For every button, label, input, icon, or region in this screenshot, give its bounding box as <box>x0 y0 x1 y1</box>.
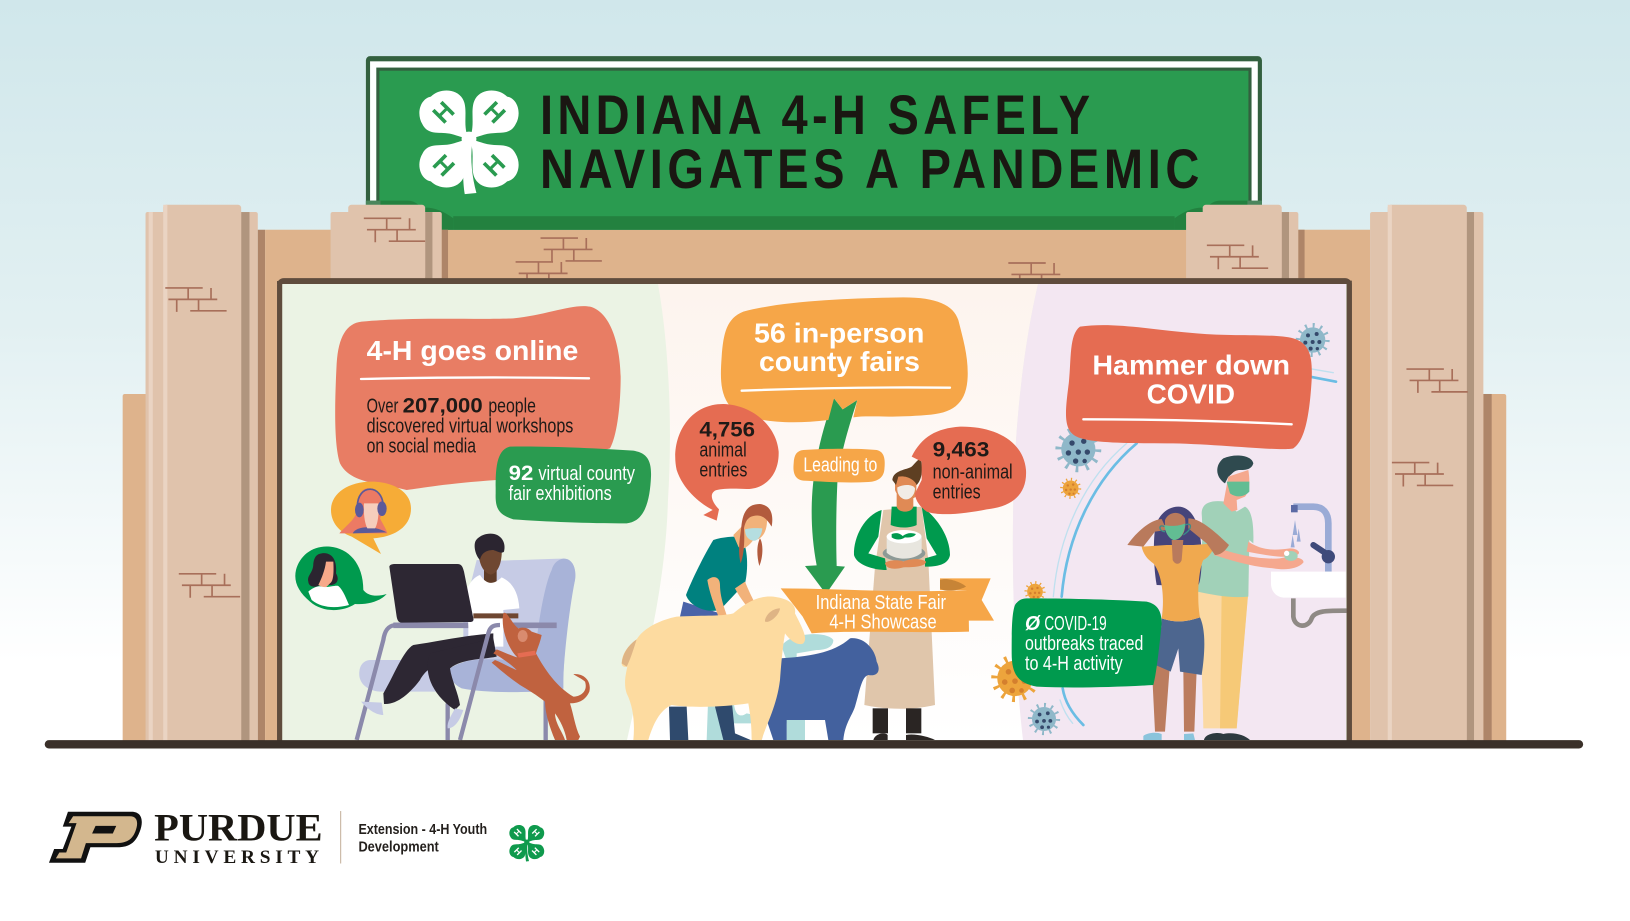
banner: Indiana State Fair 4-H Showcase: 4-H Showcase <box>829 611 937 633</box>
callout: 56 in-person county fairs: 56 in-person <box>754 317 924 348</box>
icon: green 4-H clover: H <box>512 846 524 857</box>
department text: Development <box>358 838 439 855</box>
title <box>540 83 1199 200</box>
callout: 92 virtual exhibitions: fair exhibitions <box>509 483 612 505</box>
callout: 4-H goes online: 207,000 <box>403 394 483 418</box>
banner: Indiana State Fair 4-H Showcase: Indiana State Fair <box>816 592 946 614</box>
icon: white 4-H clover: H <box>427 149 460 182</box>
main wall <box>265 230 1370 742</box>
icon: white 4-H clover: H <box>428 96 460 129</box>
banner: Indiana State Fair 4-H Showcase <box>781 578 994 633</box>
title: INDIANA 4-H SAFELY <box>540 83 1090 146</box>
icon: white 4-H clover <box>419 90 519 194</box>
icon: white 4-H clover: H <box>478 96 510 129</box>
panel backgrounds <box>277 281 1350 740</box>
callout: 4-H goes online <box>335 306 621 490</box>
panel: covid <box>994 325 1347 740</box>
icon: virus orange large <box>994 658 1036 699</box>
callout: animal entries: animal <box>699 440 747 462</box>
icon: virus top right <box>1298 325 1327 355</box>
department text <box>358 821 487 855</box>
icon: green 4-H clover <box>509 825 544 861</box>
callout: non-animal entries: non-animal <box>933 461 1013 483</box>
callout: 4-H goes online: discovered virtual workshops <box>367 416 573 438</box>
callout: Hammer down COVID: COVID <box>1147 378 1235 409</box>
icon: white 4-H clover: H <box>478 149 511 182</box>
label: leading to: Leading to <box>803 455 877 477</box>
callout: animal entries <box>675 404 779 521</box>
dog <box>492 613 590 740</box>
clover logo and title group <box>419 83 1199 200</box>
callout: animal entries: entries <box>699 460 747 482</box>
panel: online <box>295 306 651 740</box>
callout: zero outbreaks: Ø <box>1025 612 1041 635</box>
right small pillar <box>1186 205 1305 280</box>
wordmark: UNIVERSITY <box>155 847 319 868</box>
man washing hands <box>1197 456 1303 740</box>
left outer tower <box>123 205 265 742</box>
callout: 4-H goes online: people <box>488 396 536 418</box>
apron man <box>854 459 950 740</box>
ground line <box>45 740 1583 748</box>
icon: blue sheep <box>762 638 879 740</box>
callout: zero outbreaks: outbreaks traced <box>1025 633 1143 655</box>
right frame edge <box>45 281 1583 748</box>
building facade <box>123 56 1506 744</box>
icon: green 4-H clover: H <box>530 846 542 857</box>
person with laptop <box>361 534 519 740</box>
sink and faucet <box>1271 505 1347 626</box>
icon: virus orange small <box>1062 479 1080 497</box>
callout: zero outbreaks: COVID-19 <box>1044 613 1107 635</box>
icon: green 4-H clover: H <box>530 827 542 839</box>
callout: 56 in-person county fairs <box>721 297 968 422</box>
callout: 56 in-person county fairs: county fairs <box>759 346 920 377</box>
title: NAVIGATES A PANDEMIC <box>540 137 1199 200</box>
department text: Extension - 4-H Youth <box>358 821 487 838</box>
callout: zero outbreaks: to 4-H activity <box>1025 653 1123 675</box>
callout: 92 virtual exhibitions: virtual county <box>538 463 635 485</box>
icon: cream sheep <box>622 596 805 740</box>
icon: green 4-H clover: H <box>512 827 524 839</box>
sign board <box>366 56 1262 230</box>
callout: animal entries: 4,756 <box>699 418 755 442</box>
icon: orange speech bubble with headset woman <box>331 482 411 554</box>
panel: fairs <box>622 297 1026 740</box>
icon: light sheep <box>707 634 833 740</box>
icon: virus orange by box <box>1026 583 1044 601</box>
callout: 4-H goes online: on social media <box>367 436 477 458</box>
left small pillar <box>331 205 448 280</box>
wordmark: PURDUE <box>154 808 323 850</box>
wordmark <box>154 808 323 868</box>
table <box>357 625 557 740</box>
brick details <box>165 218 1468 598</box>
girl with mask <box>1127 507 1229 740</box>
callout: non-animal entries: 9,463 <box>933 438 989 462</box>
decorative arc <box>1053 369 1336 725</box>
icon: virus blue bottom <box>1030 705 1058 733</box>
callout: non-animal entries <box>912 427 1026 514</box>
icon: virus blue large <box>1059 430 1098 469</box>
callout: 92 virtual exhibitions: 92 <box>509 461 533 485</box>
arrow: leading to showcase <box>805 398 857 594</box>
callout: 4-H goes online: 4-H goes online <box>367 335 578 366</box>
icon: Purdue P <box>49 812 142 863</box>
chair <box>359 559 575 692</box>
right outer tower <box>1370 205 1506 742</box>
callout: non-animal entries: entries <box>933 481 981 503</box>
exhibit frame <box>280 281 1349 744</box>
icon: green speech bubble with woman <box>295 546 387 610</box>
callout: Hammer down COVID <box>1066 325 1312 449</box>
callout: zero outbreaks <box>1012 598 1162 687</box>
girl with sheep <box>669 504 772 740</box>
callout: 4-H goes online: Over <box>367 396 399 418</box>
callout: 92 virtual exhibitions <box>496 447 651 523</box>
callout: Hammer down COVID: Hammer down <box>1092 349 1290 380</box>
footer logo <box>49 808 544 868</box>
label: leading to <box>793 449 885 482</box>
